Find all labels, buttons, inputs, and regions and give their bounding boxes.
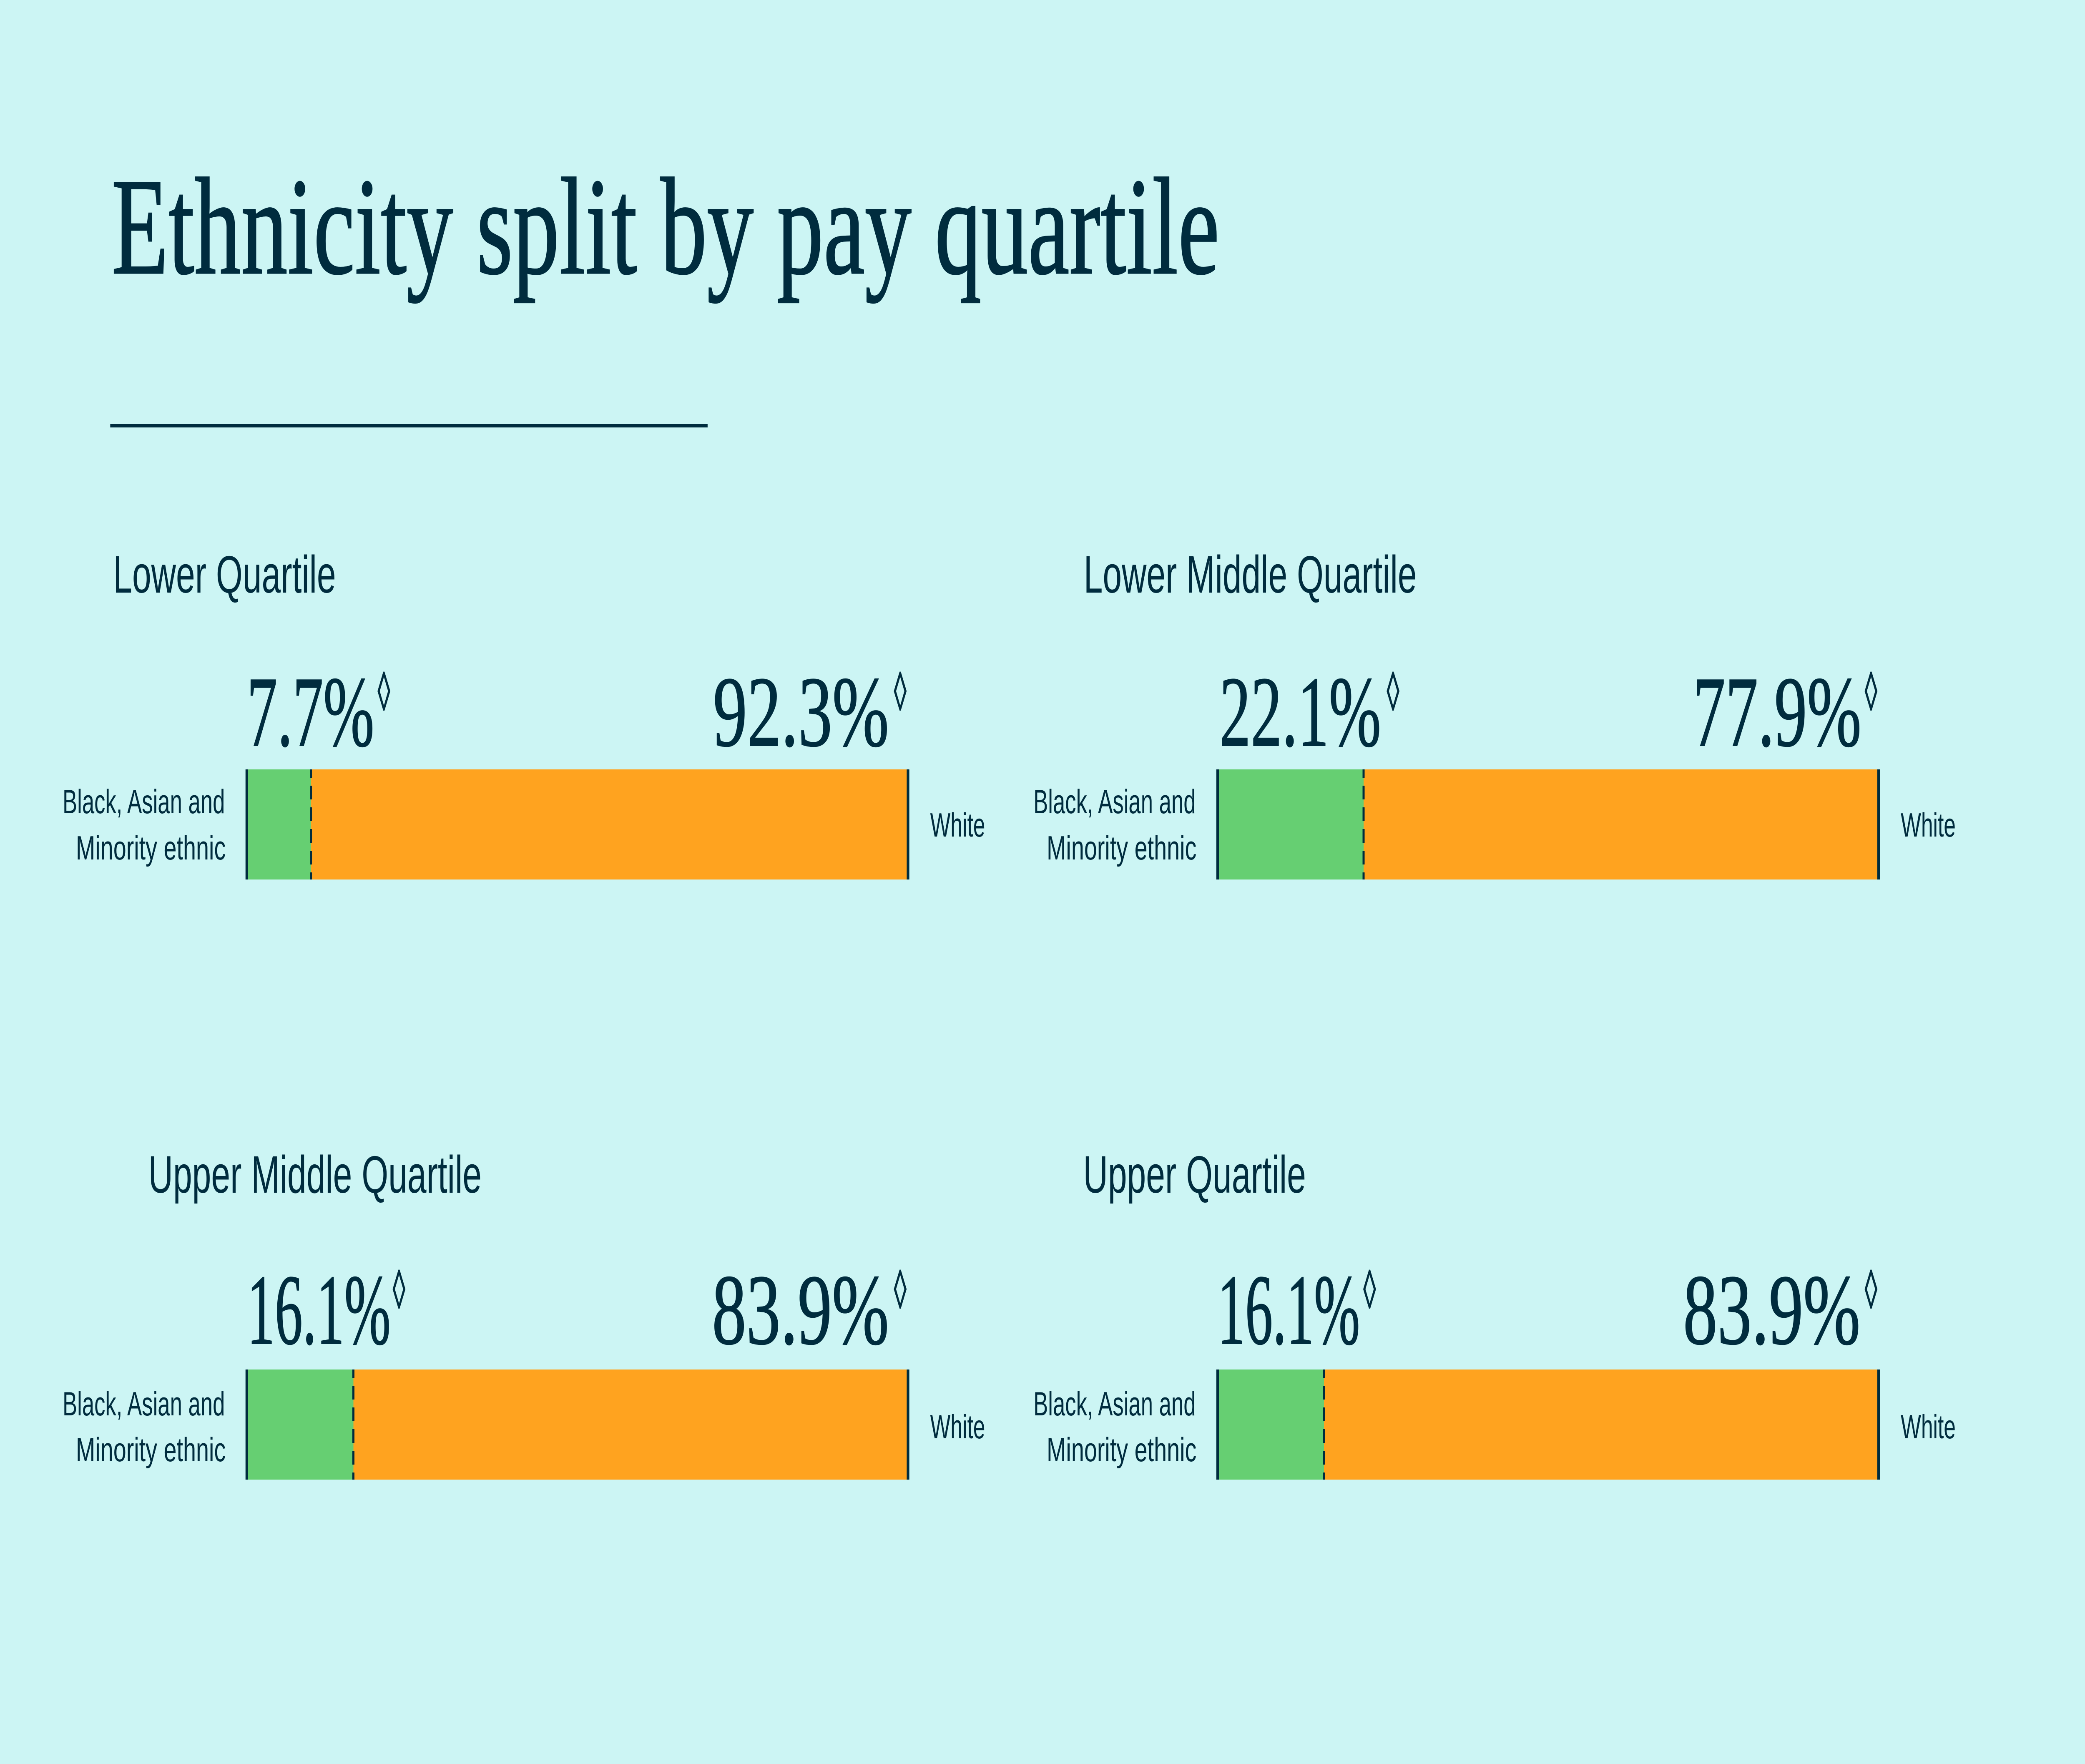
- panel: lower middle quartile: [1033, 545, 1956, 879]
- stacked bar: [246, 769, 909, 879]
- value: White: ◊: [1865, 1260, 1877, 1320]
- label: White: White: [930, 1408, 985, 1446]
- heading: Lower Middle Quartile: [1084, 545, 1417, 604]
- heading: Lower Quartile: [113, 545, 336, 604]
- value: Black, Asian and Minority ethnic: ◊: [1387, 662, 1399, 722]
- value: Black, Asian and Minority ethnic: 7.7%: [247, 657, 374, 768]
- heading: Upper Quartile: [1083, 1146, 1306, 1204]
- label: Black, Asian and Minority ethnic: Black, Asian and: [63, 783, 225, 821]
- label: Black, Asian and Minority ethnic: Black, Asian and: [63, 1385, 225, 1423]
- value: Black, Asian and Minority ethnic: ◊: [1363, 1260, 1376, 1320]
- title: Ethnicity split by pay quartile: [112, 150, 1219, 304]
- value: White: 83.9%: [712, 1255, 889, 1366]
- value: White: ◊: [894, 662, 907, 722]
- label: Black, Asian and Minority ethnic: [1033, 783, 1196, 867]
- value: White: 92.3%: [713, 657, 889, 768]
- value: Black, Asian and Minority ethnic: ◊: [393, 1260, 405, 1320]
- label: White: White: [1901, 1408, 1956, 1446]
- value: White: ◊: [894, 1260, 907, 1320]
- value: Black, Asian and Minority ethnic: 22.1%: [1219, 657, 1381, 768]
- heading: Upper Middle Quartile: [148, 1146, 482, 1204]
- panel: upper quartile: [1033, 1146, 1956, 1480]
- label: White: White: [1901, 807, 1956, 844]
- value: White: 77.9%: [1693, 657, 1861, 768]
- panel: upper middle quartile: [63, 1146, 985, 1480]
- label: Black, Asian and Minority ethnic: Black, Asian and: [1033, 1385, 1196, 1423]
- stacked bar: [246, 1369, 909, 1480]
- stacked bar: [1216, 769, 1880, 879]
- label: Black, Asian and Minority ethnic: Black, Asian and: [1033, 783, 1196, 821]
- label: Black, Asian and Minority ethnic: Minority ethnic: [76, 1431, 226, 1469]
- label: Black, Asian and Minority ethnic: [63, 783, 226, 867]
- value: Black, Asian and Minority ethnic: 16.1%: [1218, 1255, 1360, 1366]
- label: Black, Asian and Minority ethnic: Minority ethnic: [1047, 1431, 1196, 1469]
- label: Black, Asian and Minority ethnic: Minority ethnic: [76, 829, 226, 867]
- panel: lower quartile: [63, 545, 985, 879]
- label: Black, Asian and Minority ethnic: Minority ethnic: [1047, 829, 1196, 867]
- value: Black, Asian and Minority ethnic: ◊: [378, 662, 390, 722]
- value: Black, Asian and Minority ethnic: 16.1%: [247, 1255, 391, 1366]
- label: White: White: [930, 807, 985, 844]
- label: Black, Asian and Minority ethnic: [63, 1385, 226, 1469]
- stacked bar: [1216, 1369, 1880, 1480]
- value: White: 83.9%: [1683, 1255, 1860, 1366]
- value: White: ◊: [1865, 662, 1877, 722]
- label: Black, Asian and Minority ethnic: [1033, 1385, 1196, 1469]
